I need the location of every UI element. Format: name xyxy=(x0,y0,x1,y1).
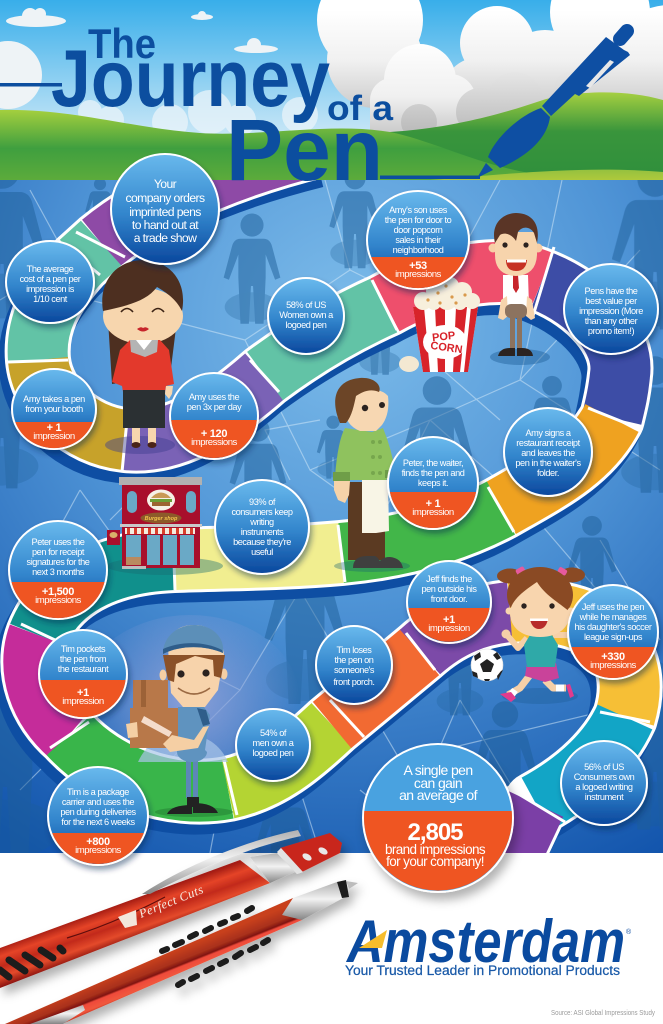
bubble: Amy signs: and leaves the xyxy=(521,448,575,458)
bubble: Peter the waiter: finds the pen and xyxy=(402,468,465,478)
bubble: Amy takes a pen: + 1 xyxy=(47,422,62,434)
board game track xyxy=(8,145,650,879)
bubble: Jeff uses the pen: Jeff uses the pen xyxy=(582,602,644,612)
bubble: Peter uses the pen: signatures for the xyxy=(27,557,90,567)
bubble: Amy's son: neighborhood xyxy=(393,245,444,255)
bubble: Tim is a package carrier: for the next 6 weeks xyxy=(61,817,135,827)
bubble: 58 percent of women: 58% of US xyxy=(286,300,326,310)
bubble: Jeff uses the pen: his daughter's soccer xyxy=(574,622,652,632)
bubble: Jeff uses the pen: impressions xyxy=(590,660,637,671)
bubble: Amy's son: sales in their xyxy=(395,235,441,245)
character: Boy xyxy=(488,213,550,365)
character: Peter the waiter xyxy=(333,378,410,572)
bubble: Tim pockets the pen xyxy=(40,631,126,717)
character: Tim the package carrier xyxy=(126,625,233,817)
bubble: Your company: to hand out at xyxy=(132,218,199,232)
board background xyxy=(0,170,663,853)
bubble: Amy signs: folder. xyxy=(537,468,559,478)
bubble: Your company: company orders xyxy=(126,191,205,205)
green hills xyxy=(390,92,663,180)
bubble: best value: best value per xyxy=(585,296,637,306)
bubble: Amy's son: door popcorn xyxy=(394,225,443,235)
bubble: Jeff finds the pen: pen outside his xyxy=(421,584,477,594)
bubble: single pen headline: 2,805 xyxy=(407,819,463,846)
bubble: Peter uses the pen: +1,500 xyxy=(42,586,74,598)
bubble: Tim is a package carrier: pen during deliveries xyxy=(60,807,137,817)
red stylus pen xyxy=(5,880,358,1024)
bubble: average cost xyxy=(7,242,93,322)
bubble: 54 percent of men: men own a xyxy=(253,738,295,748)
bubble: single pen headline: A single pen xyxy=(403,762,473,778)
title: The xyxy=(88,20,156,67)
bubble: Jeff finds the pen: front door. xyxy=(431,594,467,604)
bubble: single pen headline: can gain xyxy=(414,775,462,791)
bubble: Amy signs: Amy signs a xyxy=(525,428,572,438)
bubble: Peter uses the pen: pen for receipt xyxy=(32,547,85,557)
title: Pen xyxy=(226,102,383,199)
bubble: Tim is a package carrier xyxy=(49,768,147,864)
bubble: Peter the waiter xyxy=(389,438,477,528)
bubble: Your company: imprinted pens xyxy=(129,205,201,219)
bubble: Peter uses the pen: next 3 months xyxy=(32,567,85,577)
icon: soccer ball xyxy=(471,649,503,681)
bubble: best value: impression (More xyxy=(579,306,643,316)
bubble: Amy uses the pen: impressions xyxy=(191,437,238,448)
bubble: Jeff finds the pen: impression xyxy=(428,623,470,634)
small clouds xyxy=(0,8,278,109)
bubble: Peter the waiter: + 1 xyxy=(426,498,441,510)
bubble: Amy takes a pen: Amy takes a pen xyxy=(23,394,85,404)
icon: popcorn bucket: POP xyxy=(432,330,456,344)
bubble: Amy uses the pen: pen 3x per day xyxy=(187,402,242,412)
bubble: single pen headline: an average of xyxy=(399,787,478,803)
bubble: Amy's son: +53 xyxy=(409,260,427,272)
bubble: best value: than any other xyxy=(585,316,638,326)
background people silhouettes xyxy=(0,154,663,897)
icon: burger shop xyxy=(107,477,223,575)
bubble: Amy signs: restaurant receipt xyxy=(516,438,581,448)
red pen with clip: Perfect Cuts xyxy=(136,882,205,921)
title: Journey xyxy=(51,34,330,124)
white footer xyxy=(0,853,663,1024)
bubble: 93 percent xyxy=(216,481,308,573)
bubble: single pen headline: brand impressions xyxy=(385,842,486,857)
bubble: Jeff finds the pen: +1 xyxy=(443,614,455,626)
bubble: 56 percent of consumers: a logoed writing xyxy=(575,782,633,792)
bubble: 93 percent: 93% of xyxy=(249,497,276,507)
bubble: Tim pockets the pen: Tim pockets xyxy=(61,644,106,654)
bubble: single pen headline: for your company! xyxy=(386,854,484,869)
bubble: 58 percent of women: Women own a xyxy=(279,310,334,320)
character: Amy xyxy=(102,260,183,454)
red pen with clip xyxy=(0,830,342,988)
bubble: Tim is a package carrier: +800 xyxy=(86,836,110,848)
logo: Amsterdam: ® xyxy=(626,928,632,936)
bubble: Amy's son: the pen for door to xyxy=(385,215,452,225)
bubble: average cost: impression is xyxy=(26,284,75,294)
bubble: Jeff uses the pen xyxy=(569,586,657,678)
bubble: Amy takes a pen xyxy=(13,370,95,448)
bubble: Tim loses the pen: someone's xyxy=(334,665,375,675)
bubble: best value: Pens have the xyxy=(585,286,638,296)
bubble: single pen headline xyxy=(364,745,512,891)
bubble: 56 percent of consumers: Consumers own xyxy=(574,772,635,782)
bubble: Peter uses the pen: Peter uses the xyxy=(32,537,85,547)
bubble: 93 percent: consumers keep xyxy=(231,507,293,517)
bubble: 58 percent of women xyxy=(269,279,343,353)
bubble: best value: promo item!) xyxy=(588,326,634,336)
bubble: Your company xyxy=(112,155,218,263)
bubble: Peter uses the pen: impressions xyxy=(35,595,82,606)
bubble: Amy takes a pen: from your booth xyxy=(25,404,83,414)
bubble: Amy's son: impressions xyxy=(395,269,442,280)
bubble: 56 percent of consumers: 56% of US xyxy=(584,762,624,772)
bubble: Amy uses the pen: Amy uses the xyxy=(189,392,239,402)
bubble: Tim is a package carrier: impressions xyxy=(75,845,122,856)
bubble: average cost: cost of a pen per xyxy=(20,274,81,284)
network lines xyxy=(0,180,660,853)
bubble: 93 percent: useful xyxy=(251,547,273,557)
bubble: 58 percent of women: logoed pen xyxy=(286,320,327,330)
bubble: 93 percent: because they're xyxy=(233,537,291,547)
bubble: Amy signs xyxy=(505,409,591,495)
bubble: Tim loses the pen xyxy=(317,627,391,703)
icon: popcorn bucket xyxy=(399,277,480,372)
bubble: 54 percent of men xyxy=(237,710,309,780)
bubble: 56 percent of consumers: instrument xyxy=(585,792,624,802)
logo: Amsterdam: Your Trusted Leader in Promotional Products xyxy=(345,963,620,978)
bubble: 93 percent: instruments xyxy=(241,527,284,537)
bubble: Amy's son xyxy=(368,192,468,288)
bubble: Peter the waiter: Peter, the waiter, xyxy=(403,458,463,468)
bubble: 54 percent of men: logoed pen xyxy=(253,748,294,758)
icon: big blue pen xyxy=(477,31,630,178)
bubble: Tim pockets the pen: the restaurant xyxy=(58,664,109,674)
bubble: Tim loses the pen: the pen on xyxy=(335,655,374,665)
bubble: Amy uses the pen: + 120 xyxy=(201,428,227,440)
bubble: average cost: 1/10 cent xyxy=(33,294,68,304)
bubble: Tim is a package carrier: carrier and uses the xyxy=(62,797,134,807)
periwinkle glow inside lower loop xyxy=(80,615,300,785)
icon: popcorn bucket: CORN xyxy=(430,340,463,356)
bubble: 54 percent of men: 54% of xyxy=(260,728,287,738)
title xyxy=(0,20,480,199)
bubble: Amy's son: Amy's son uses xyxy=(389,205,448,215)
bubble: Tim loses the pen: Tim loses xyxy=(337,645,372,655)
bubble: Peter the waiter: keeps it. xyxy=(418,478,448,488)
bubble: Jeff uses the pen: +330 xyxy=(601,651,625,663)
bubble: Tim pockets the pen: the pen from xyxy=(60,654,107,664)
bubble: Amy signs: pen in the waiter's xyxy=(515,458,581,468)
bubble: Your company: a trade show xyxy=(134,231,197,245)
big cumulus clouds xyxy=(317,0,663,145)
bubble: 93 percent: writing xyxy=(249,517,274,527)
bubble: Peter uses the pen xyxy=(10,522,106,618)
bubble: 56 percent of consumers xyxy=(562,742,646,824)
title: of a xyxy=(327,89,394,128)
bubble: Jeff uses the pen: while he manages xyxy=(579,612,647,622)
bubble: Tim loses the pen: front porch. xyxy=(333,677,375,687)
bubble: Jeff finds the pen: Jeff finds the xyxy=(426,574,472,584)
bubble: Your company: Your xyxy=(154,177,177,191)
bubble: Peter the waiter: impression xyxy=(412,507,454,518)
bubble: Jeff finds the pen xyxy=(408,562,490,642)
bubble: Tim is a package carrier: Tim is a package xyxy=(67,787,129,797)
character: Jeff's daughter xyxy=(497,566,585,704)
bubble: Jeff uses the pen: league sign-ups xyxy=(584,632,643,642)
bubble: Amy takes a pen: impression xyxy=(33,431,75,442)
icon: burger shop: Burger shop xyxy=(145,516,178,522)
bubble: best value xyxy=(565,265,657,353)
bubble: Tim pockets the pen: impression xyxy=(62,696,104,707)
bubble: Tim pockets the pen: +1 xyxy=(77,687,89,699)
bubble: Amy uses the pen xyxy=(171,374,257,458)
sky header xyxy=(0,0,663,180)
bubble: average cost: The average xyxy=(27,264,74,274)
